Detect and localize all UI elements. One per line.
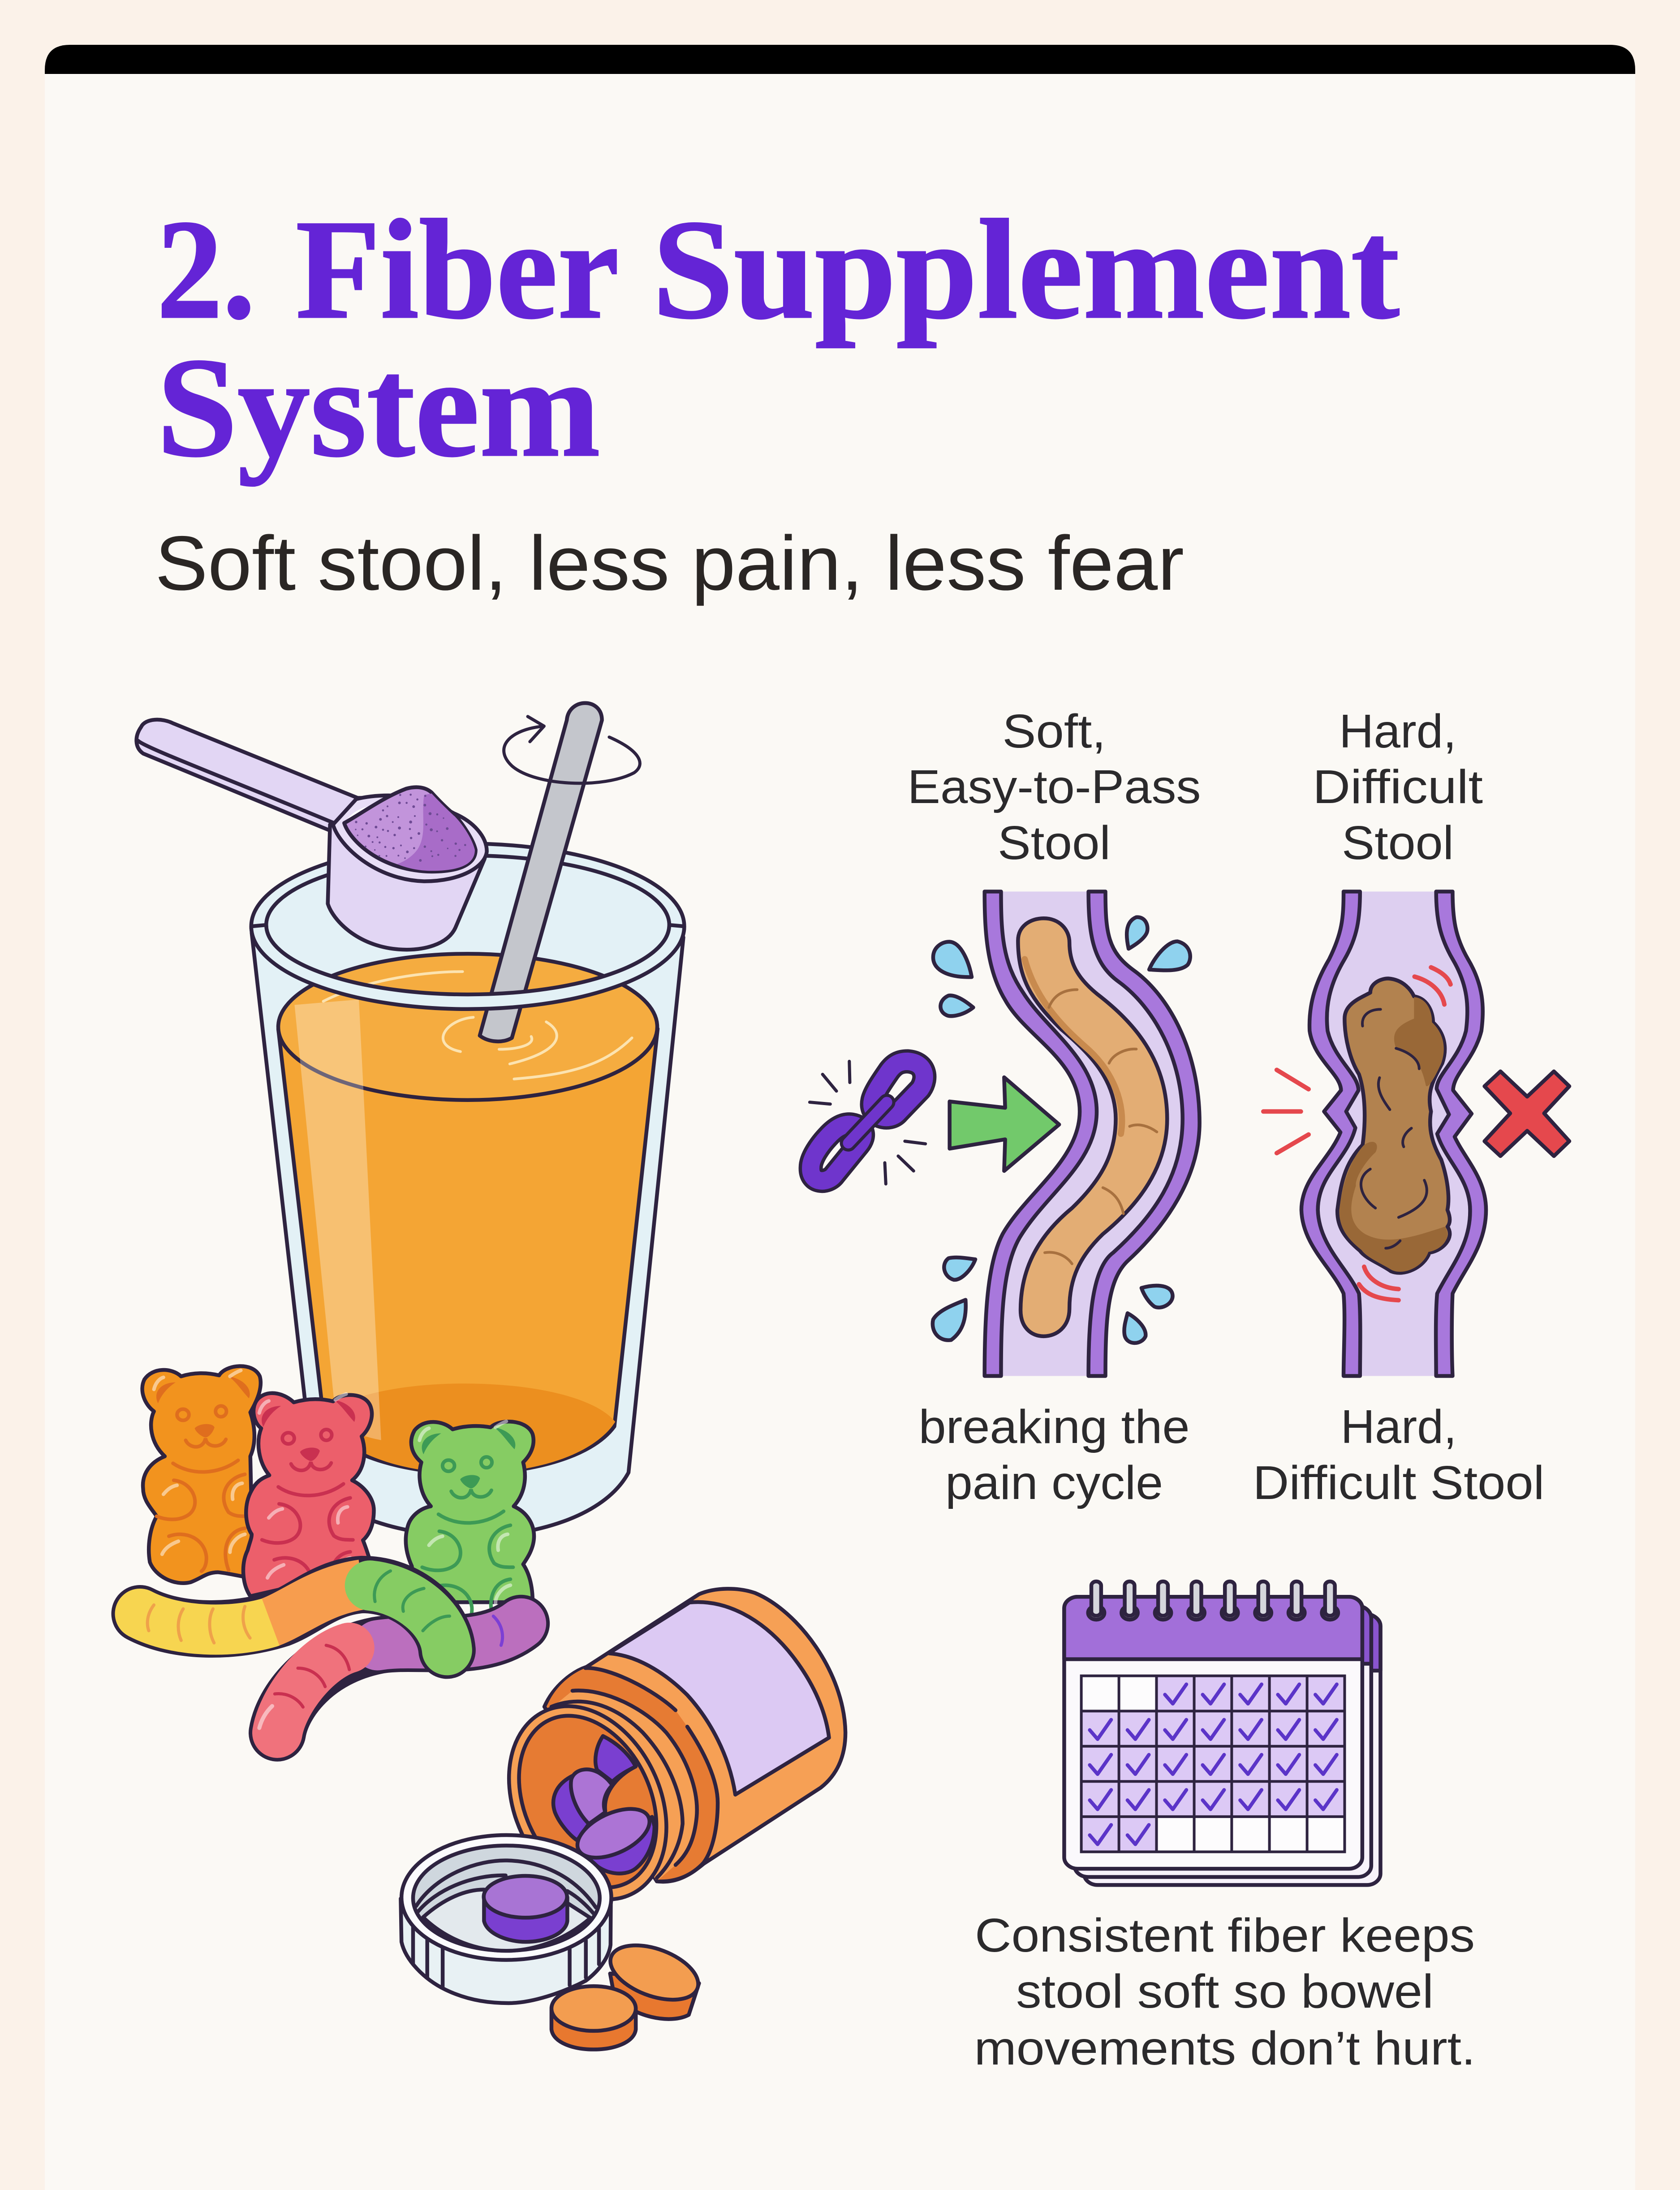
- label: soft stool heading: [908, 705, 1201, 869]
- front page: [1064, 1597, 1362, 1869]
- gummy bear: red: [243, 1393, 374, 1596]
- back pages: [1084, 1615, 1380, 1885]
- caption: consistent fiber: [974, 1909, 1476, 2075]
- label: soft stool heading: Soft,: [1003, 705, 1106, 758]
- orange liquid: [278, 954, 658, 1473]
- caption: hard difficult stool: Hard,: [1340, 1400, 1457, 1453]
- soft stool bowel: [985, 892, 1200, 1376]
- liquid ripples: [323, 972, 632, 1079]
- loose orange tablets: [551, 1935, 706, 2049]
- bottle body: [544, 1589, 845, 1882]
- soft stool: [1018, 918, 1167, 1336]
- gummy bear: green: [406, 1421, 534, 1622]
- purple tablet in cap: [484, 1896, 567, 1942]
- glass rim front: [251, 925, 684, 1009]
- green arrow: [950, 1077, 1059, 1171]
- caption: hard difficult stool: [1253, 1400, 1545, 1509]
- title: Supplement: [652, 190, 1401, 349]
- label: soft stool heading: Stool: [998, 816, 1111, 869]
- label: soft stool heading: Easy-to-Pass: [908, 760, 1201, 813]
- rotation arrow: [504, 717, 640, 783]
- check marks: [1090, 1685, 1337, 1844]
- caption: consistent fiber: stool soft so bowel: [1016, 1965, 1434, 2018]
- hard stool: [1337, 979, 1450, 1273]
- fiber powder: [344, 787, 476, 872]
- thread lines: [551, 1668, 718, 1881]
- neck band: [547, 1668, 718, 1881]
- bottle mouth lip: [478, 1680, 697, 1926]
- glass rim back: [251, 843, 684, 1009]
- red cross: [1485, 1071, 1569, 1156]
- broken chain: [810, 1061, 926, 1184]
- title: Fiber: [296, 190, 619, 348]
- caption: consistent fiber: Consistent fiber keeps: [975, 1909, 1475, 1962]
- subtitle: Soft stool, less pain, less fear: [155, 520, 1184, 606]
- calendar grid: [1081, 1676, 1344, 1852]
- illustration: glass of orange fiber drink with scoop and stirrer: [137, 703, 684, 1537]
- label: hard stool heading: Stool: [1342, 816, 1454, 869]
- gummy bear: orange: [142, 1366, 261, 1583]
- caption: breaking the pain cycle: pain cycle: [945, 1456, 1163, 1509]
- pain marks: [1263, 968, 1451, 1300]
- diagrams: soft and hard stool in the bowel: [810, 892, 1569, 1376]
- neck thread: [551, 1690, 697, 1881]
- scoop handle: [137, 720, 385, 832]
- black top bar: [45, 45, 1635, 74]
- hard stool bowel: [1263, 892, 1486, 1376]
- label: hard stool heading: Difficult: [1313, 760, 1483, 813]
- bottle label: [609, 1602, 829, 1795]
- icon: calendar with check marks: [1064, 1581, 1380, 1885]
- binder rings: [1088, 1581, 1338, 1620]
- purple capsules in bottle: [553, 1736, 657, 1874]
- caption: consistent fiber: movements don’t hurt.: [974, 2022, 1476, 2075]
- title: 2.: [157, 190, 255, 348]
- gummy worm: red and purple: [259, 1616, 521, 1733]
- caption: breaking the pain cycle: breaking the: [918, 1400, 1190, 1453]
- title: [157, 190, 1401, 487]
- title: System: [157, 328, 600, 487]
- fiber capsule bottle: [478, 1589, 845, 1926]
- caption: hard difficult stool: Difficult Stool: [1253, 1456, 1545, 1509]
- stirring rod: [480, 703, 602, 1041]
- pill cap with tablet: [401, 1835, 612, 2003]
- glass body: [252, 933, 683, 1537]
- glass highlight: [294, 999, 381, 1440]
- gummy worms: [140, 1571, 521, 1733]
- gummy worm: yellow, orange and green: [140, 1571, 450, 1650]
- label: hard stool heading: Hard,: [1339, 705, 1456, 758]
- label: hard stool heading: [1313, 705, 1483, 869]
- water drops: [933, 917, 1190, 1343]
- calendar header: [1064, 1597, 1362, 1659]
- gummy bears: [142, 1366, 534, 1622]
- caption: breaking the pain cycle: [918, 1400, 1190, 1509]
- measuring scoop: [328, 787, 487, 950]
